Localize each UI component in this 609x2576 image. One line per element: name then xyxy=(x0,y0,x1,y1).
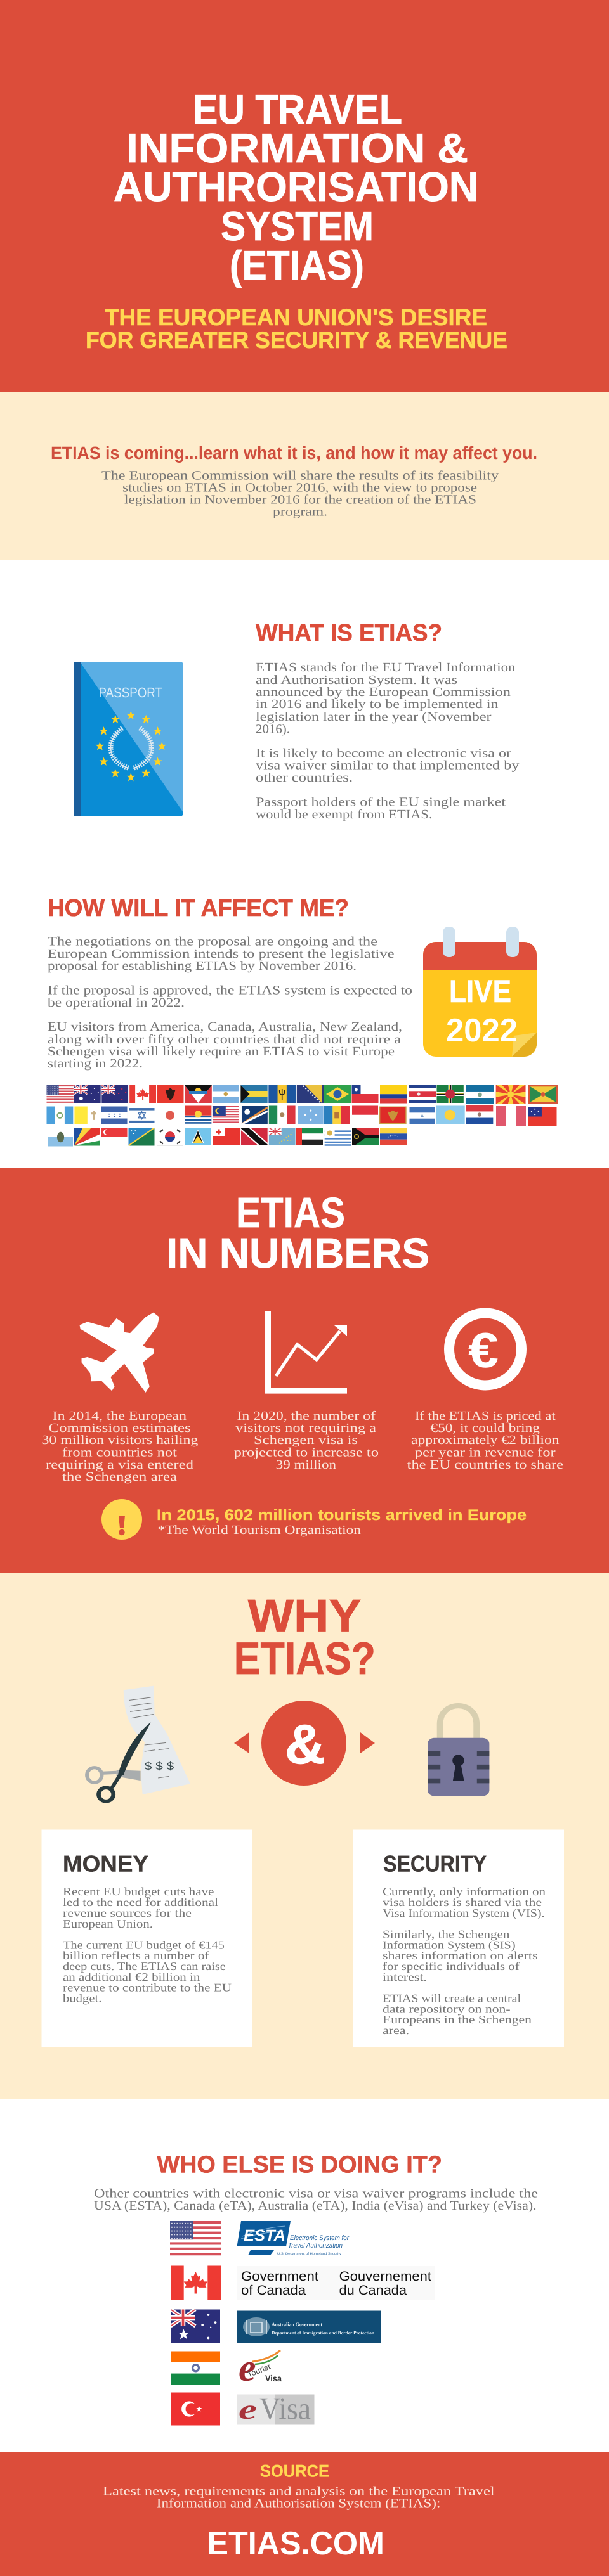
text block: in 2016 and likely to be implemented in xyxy=(256,697,499,711)
text block: legislation later in the year (November xyxy=(256,710,492,724)
row: India xyxy=(171,2347,282,2390)
flag: Barbados xyxy=(268,1085,296,1103)
card text: revenue sources for the xyxy=(63,1907,192,1919)
logo: ESTA: U.S. Department of Homeland Security xyxy=(277,2252,342,2256)
flag: Tonga xyxy=(213,1128,240,1145)
flag: USA xyxy=(170,2221,221,2255)
flag: Brazil xyxy=(324,1085,351,1103)
icon: calendar live 2022: LIVE xyxy=(449,974,511,1009)
card text: data repository on non- xyxy=(383,2003,511,2016)
icon: ampersand with arrows: & xyxy=(285,1713,325,1775)
flag: Japan xyxy=(166,1111,174,1120)
flag: Guatemala xyxy=(47,1107,74,1124)
card text: led to the need for additional xyxy=(63,1896,218,1909)
stat: visitors 2020: Schengen visa is xyxy=(254,1433,358,1447)
flag: Samoa xyxy=(528,1107,557,1126)
card text: Recent EU budget cuts have xyxy=(63,1885,214,1898)
flag: Marshall Islands xyxy=(241,1106,268,1124)
flag: Moldova xyxy=(324,1106,350,1124)
card text: shares information on alerts xyxy=(383,1949,538,1962)
flag: USA xyxy=(46,1085,74,1103)
flag: Vatican City xyxy=(74,1107,96,1124)
flag: Grenada xyxy=(528,1085,558,1104)
subtitle: THE EUROPEAN UNION'S DESIRE xyxy=(105,304,487,330)
website: ETIAS.COM xyxy=(207,2525,384,2562)
flag: Paraguay xyxy=(466,1105,494,1124)
logo: Government of Canada: of Canada xyxy=(241,2283,306,2298)
flag: Argentina xyxy=(212,1085,239,1103)
card text: Europeans in the Schengen xyxy=(383,2013,532,2026)
flag: Chile xyxy=(351,1085,378,1103)
flag: Trinidad and Tobago xyxy=(241,1126,268,1147)
logo: Government of Canada xyxy=(237,2266,435,2300)
card text: Visa Information System (VIS). xyxy=(383,1907,544,1919)
flag: Venezuela xyxy=(380,1128,407,1145)
text block: Schengen visa will likely require an ETIAS to visit Europe xyxy=(48,1045,395,1059)
card text xyxy=(383,1885,546,2037)
card text: Similarly, the Schengen xyxy=(383,1928,509,1941)
card text: The current EU budget of €145 xyxy=(63,1938,225,1951)
flag: Colombia xyxy=(380,1085,407,1103)
panel: etias in numbers xyxy=(0,1168,609,1573)
stat: visitors 2014: Commission estimates xyxy=(48,1421,191,1435)
title: INFORMATION & xyxy=(126,125,468,171)
stat: visitors 2014: requiring a visa entered xyxy=(46,1458,193,1472)
text block: It is likely to become an electronic visa or xyxy=(256,747,511,761)
callout: tourists: In 2015, 602 million tourists arrived in Europe xyxy=(157,1507,527,1524)
heading: WHAT IS ETIAS? xyxy=(256,620,442,647)
text block: be operational in 2022. xyxy=(48,996,185,1010)
flag: India xyxy=(171,2352,220,2385)
stat: visitors 2020 xyxy=(234,1409,379,1472)
card text: area. xyxy=(383,2024,409,2037)
stat: revenue xyxy=(407,1409,563,1472)
card text: revenue to contribute to the EU xyxy=(63,1981,232,1994)
card text: deep cuts. The ETIAS can raise xyxy=(63,1960,226,1973)
text block: The negotiations on the proposal are ongoing and the xyxy=(48,934,377,948)
text block: ETIAS stands for the EU Travel Information xyxy=(256,660,515,674)
text block: If the proposal is approved, the ETIAS system is expected to xyxy=(48,984,412,998)
stat: visitors 2014 xyxy=(42,1409,198,1484)
title: EU TRAVEL xyxy=(193,86,402,132)
flag: Malaysia xyxy=(212,1106,239,1123)
flag: North Macedonia xyxy=(496,1085,526,1104)
stat: visitors 2020: 39 million xyxy=(276,1458,336,1472)
flag: Albania xyxy=(157,1085,184,1103)
heading: ETIAS xyxy=(236,1189,345,1237)
card heading: SECURITY xyxy=(383,1851,487,1876)
text block: Other countries with electronic visa or visa waiver programs include the xyxy=(94,2187,538,2201)
icon: rising chart xyxy=(265,1311,347,1394)
card text: ETIAS will create a central xyxy=(383,1992,521,2004)
flag: Canada xyxy=(129,1085,156,1103)
logo: ESTA: Travel Authorization xyxy=(288,2242,343,2250)
card text: visa holders is shared via the xyxy=(383,1896,542,1909)
flag: Palau xyxy=(436,1105,465,1124)
logo: ESTA xyxy=(237,2221,350,2256)
panel: introduction xyxy=(0,392,609,560)
flag: Peru xyxy=(496,1106,526,1126)
flag: Saint Lucia xyxy=(185,1128,211,1145)
card text: billion reflects a number of xyxy=(63,1949,209,1962)
icon: scissors cutting bill xyxy=(87,1686,190,1801)
icon: plane xyxy=(80,1313,159,1393)
heading: HOW WILL IT AFFECT ME? xyxy=(48,895,349,922)
intro text: program. xyxy=(273,505,327,518)
flag: San Marino xyxy=(48,1132,73,1146)
flag: United Arab Emirates xyxy=(296,1128,323,1145)
card text: an additional €2 billion in xyxy=(63,1971,200,1983)
flag: Mexico xyxy=(269,1105,296,1124)
flag: Monaco xyxy=(352,1105,378,1115)
icon: euro coin xyxy=(449,1313,521,1386)
row: Canada xyxy=(171,2265,435,2300)
card text: interest. xyxy=(383,1971,427,1983)
stat: revenue: approximately €2 billion xyxy=(411,1433,560,1447)
text block: announced by the European Commission xyxy=(256,685,511,699)
panel: hero xyxy=(0,0,609,392)
card: security xyxy=(353,1829,564,2047)
stat: visitors 2014: 30 million visitors hailing xyxy=(42,1433,198,1447)
flag: Bosnia and Herzegovina xyxy=(297,1085,324,1103)
intro text: studies on ETIAS in October 2016, with the view to propose xyxy=(122,480,477,494)
text block: and Authorisation System. It was xyxy=(256,673,457,687)
title: SYSTEM xyxy=(221,203,374,249)
card text xyxy=(63,1885,232,2004)
flag grid xyxy=(46,1085,558,1147)
source text: Latest news, requirements and analysis on the European Travel xyxy=(103,2485,495,2499)
icon: scissors cutting bill: $ $ $ xyxy=(145,1760,174,1772)
flag: El Salvador xyxy=(466,1085,494,1104)
logo: Government of Canada: Gouvernement xyxy=(339,2269,431,2284)
flag: Uruguay xyxy=(325,1128,351,1146)
intro text: The European Commission will share the results of its feasibility xyxy=(102,469,499,483)
logo: Australian Government: Department of Immigration and Border Protection xyxy=(272,2330,375,2336)
panel: source footer xyxy=(0,2452,609,2576)
heading: WHO ELSE IS DOING IT? xyxy=(157,2151,442,2178)
stat: visitors 2020: projected to increase to xyxy=(234,1445,379,1459)
heading: ETIAS? xyxy=(234,1633,376,1684)
text block: Passport holders of the EU single market xyxy=(256,795,506,809)
row: USA xyxy=(170,2221,350,2256)
text block: proposal for establishing ETIAS by November 2016. xyxy=(48,959,357,973)
logo: eVisa: e xyxy=(239,2394,257,2425)
stat: revenue: If the ETIAS is priced at xyxy=(415,1409,556,1423)
text block: would be exempt from ETIAS. xyxy=(256,808,433,821)
flag: Bahamas xyxy=(240,1085,268,1103)
text block: European Commission intends to present the legislative xyxy=(48,947,395,961)
flag: Nicaragua xyxy=(410,1107,435,1124)
card text: Currently, only information on xyxy=(383,1885,546,1898)
heading: WHY xyxy=(248,1591,362,1642)
flag: Kiribati xyxy=(185,1105,212,1124)
flag: Singapore xyxy=(102,1128,127,1137)
stat: revenue: €50, it could bring xyxy=(430,1421,540,1435)
row: Turkey xyxy=(171,2391,315,2426)
flag: Turkey xyxy=(171,2392,220,2425)
stat: visitors 2020: visitors not requiring a xyxy=(235,1421,376,1435)
icon: calendar live 2022 xyxy=(423,927,537,1057)
stat: revenue: per year in revenue for xyxy=(415,1445,556,1459)
row: Australia xyxy=(171,2310,381,2343)
heading xyxy=(166,1189,429,1277)
text block: EU visitors from America, Canada, Australia, New Zealand, xyxy=(48,1020,402,1034)
icon: euro coin: € xyxy=(468,1322,499,1378)
card text: Information System (SIS) xyxy=(383,1938,516,1951)
card text: European Union. xyxy=(63,1917,153,1930)
logo: Government of Canada: Government xyxy=(241,2269,318,2284)
stat: visitors 2020: In 2020, the number of xyxy=(237,1409,376,1423)
flag: Montenegro xyxy=(379,1107,407,1124)
card text: budget. xyxy=(63,1992,102,2004)
stat: visitors 2014: In 2014, the European xyxy=(53,1409,187,1423)
flag: Costa Rica xyxy=(409,1085,436,1103)
text block xyxy=(256,660,519,821)
flag: Australia xyxy=(171,2310,220,2343)
source heading: SOURCE xyxy=(260,2462,329,2481)
text block xyxy=(48,934,412,1071)
flag: Seychelles xyxy=(74,1128,100,1146)
source text xyxy=(103,2485,495,2510)
source text: Information and Authorisation System (ETIAS): xyxy=(157,2496,440,2510)
icon: passport: PASSPORT xyxy=(99,685,162,700)
logo: e-Tourist Visa xyxy=(239,2347,282,2390)
callout: tourists xyxy=(102,1499,527,1540)
logo: Australian Government xyxy=(237,2311,381,2343)
icon: ampersand with arrows xyxy=(234,1701,375,1786)
panel: why etias xyxy=(0,1573,609,2099)
logo: eVisa xyxy=(237,2391,315,2426)
flag: Honduras xyxy=(102,1107,127,1124)
panel: what is etias xyxy=(74,620,519,821)
intro heading: ETIAS is coming...learn what it is, and how it may affect you. xyxy=(51,443,537,463)
text block: along with over fifty other countries that did not require a xyxy=(48,1033,401,1046)
text block: starting in 2022. xyxy=(48,1057,143,1071)
flag: South Korea xyxy=(157,1128,183,1146)
title: (ETIAS) xyxy=(230,242,364,288)
flag: Vanuatu xyxy=(352,1128,379,1145)
flag: Antigua and Barbuda xyxy=(184,1085,212,1103)
card: money xyxy=(42,1829,252,2047)
subtitle: FOR GREATER SECURITY & REVENUE xyxy=(86,327,508,353)
logo: ESTA: ESTA xyxy=(244,2227,285,2244)
text block: other countries. xyxy=(256,771,353,785)
icon: padlock xyxy=(428,1706,489,1796)
logo: ESTA: Electronic System for xyxy=(290,2234,350,2242)
flag: Micronesia xyxy=(298,1106,324,1124)
flag: Solomon Islands xyxy=(128,1128,155,1146)
intro text: legislation in November 2016 for the creation of the ETIAS xyxy=(124,493,476,507)
text block: 2016). xyxy=(256,723,290,737)
icon: passport xyxy=(74,662,183,816)
logo: e-Tourist Visa: Tourist xyxy=(246,2361,272,2380)
intro text xyxy=(102,469,499,518)
card heading: MONEY xyxy=(63,1851,148,1876)
flag: Israel xyxy=(129,1108,155,1123)
title xyxy=(114,86,478,288)
callout: tourists: *The World Tourism Organisation xyxy=(158,1523,361,1537)
text block: visa waiver similar to that implemented by xyxy=(256,758,519,772)
text block: USA (ESTA), Canada (eTA), Australia (eTA), India (eVisa) and Turkey (eVisa). xyxy=(94,2199,537,2213)
card text: for specific individuals of xyxy=(383,1960,520,1973)
logo: e-Tourist Visa: e xyxy=(239,2347,256,2390)
logo: e-Tourist Visa: Visa xyxy=(265,2373,282,2383)
title: AUTHRORISATION xyxy=(114,164,478,210)
logo: Government of Canada: du Canada xyxy=(339,2283,407,2298)
logo: eVisa: Visa xyxy=(259,2391,311,2426)
icon: calendar live 2022: 2022 xyxy=(446,1012,518,1049)
flag: Australia xyxy=(74,1085,101,1103)
flag: Canada xyxy=(171,2265,221,2300)
logo: Australian Government: Australian Government xyxy=(272,2321,322,2328)
heading xyxy=(234,1591,376,1684)
panel: who else is doing it xyxy=(94,2151,538,2426)
stat: revenue: the EU countries to share xyxy=(407,1458,563,1472)
subtitle xyxy=(86,304,508,353)
flag: New Zealand xyxy=(102,1085,128,1103)
flag: Dominica xyxy=(436,1085,464,1103)
flag: Tuvalu xyxy=(269,1128,296,1145)
stat: visitors 2014: the Schengen area xyxy=(62,1470,177,1484)
stat: visitors 2014: from countries not xyxy=(62,1445,178,1459)
text block xyxy=(94,2187,538,2213)
heading: IN NUMBERS xyxy=(166,1230,429,1277)
panel: how will it affect me xyxy=(46,895,558,1147)
